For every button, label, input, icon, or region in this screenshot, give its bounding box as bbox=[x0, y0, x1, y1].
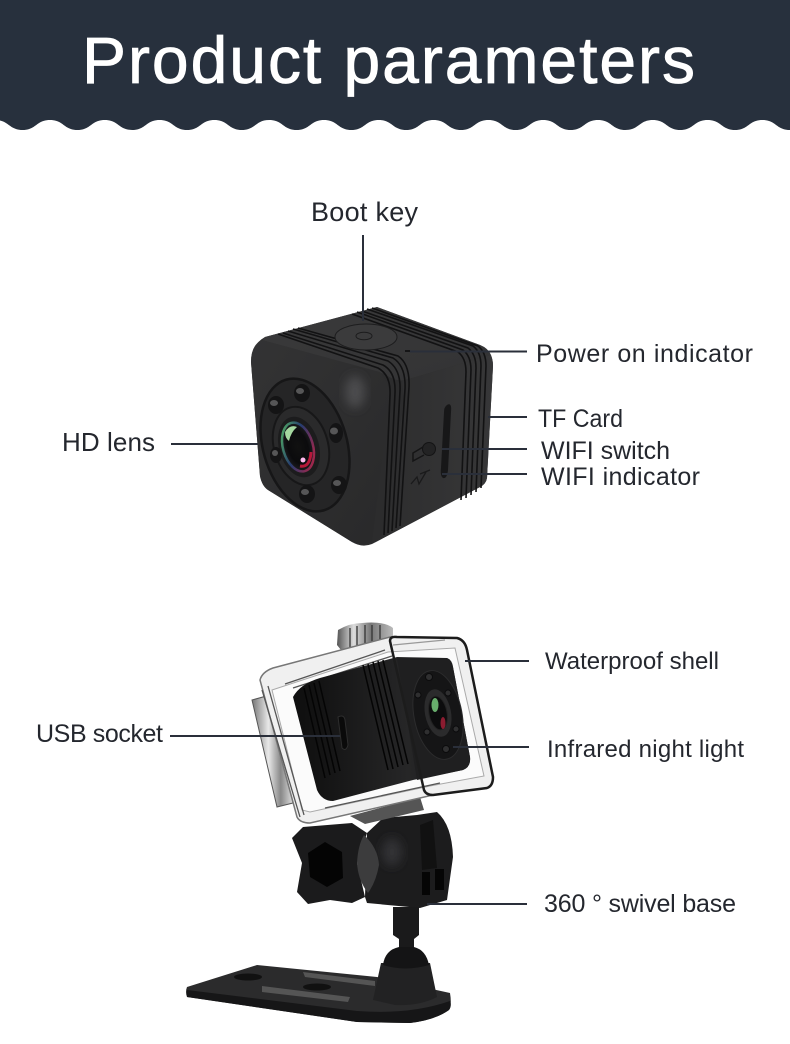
label: Power on indicator: Power on indicator bbox=[536, 340, 753, 368]
camera body silhouette bbox=[251, 307, 493, 546]
ball joint dome bbox=[383, 947, 429, 968]
hexagon socket bbox=[308, 842, 343, 887]
label: TF Card: TF Card bbox=[538, 405, 623, 433]
label: Waterproof shell: Waterproof shell bbox=[545, 648, 719, 675]
arm shading bbox=[357, 835, 379, 893]
arm cylinder highlight bbox=[382, 838, 402, 866]
top face bbox=[262, 307, 491, 380]
post bbox=[393, 907, 419, 950]
shell inner window bbox=[272, 648, 484, 812]
front LEDs bbox=[415, 674, 459, 752]
WIFI switch bbox=[413, 442, 436, 461]
black camera body bbox=[293, 657, 470, 801]
swivel knob bbox=[292, 823, 367, 904]
front lens bbox=[406, 666, 470, 764]
WIFI icon mark bbox=[411, 470, 430, 484]
corner highlight bbox=[345, 376, 365, 408]
lens glass bbox=[277, 419, 319, 475]
side hinge bbox=[252, 695, 293, 807]
product photo: camera in waterproof shell on mount bbox=[186, 623, 493, 1023]
right side face bbox=[372, 355, 493, 544]
grip ridges bbox=[278, 308, 486, 535]
shell chrome details bbox=[262, 640, 445, 817]
front frame gasket bbox=[390, 637, 493, 795]
label: 360 ° swivel base: 360 ° swivel base bbox=[544, 890, 736, 918]
front face bbox=[251, 340, 390, 544]
label: Boot key: Boot key bbox=[311, 197, 418, 227]
label: Infrared night light: Infrared night light bbox=[547, 736, 744, 763]
label: WIFI switch: WIFI switch bbox=[541, 437, 670, 465]
front camera face bbox=[397, 658, 470, 780]
LED centres bbox=[270, 388, 341, 495]
label: WIFI indicator: WIFI indicator bbox=[541, 463, 700, 491]
label: HD lens: HD lens bbox=[62, 427, 155, 457]
title: Product parameters bbox=[82, 23, 695, 97]
body ridges bbox=[304, 660, 408, 778]
product photo: camera cube bbox=[246, 307, 493, 546]
base plate bbox=[186, 965, 451, 1023]
USB slot bbox=[338, 716, 348, 749]
boot key button bbox=[335, 324, 397, 350]
mount clips bbox=[420, 820, 444, 895]
clear shell bbox=[260, 637, 493, 823]
swivel arm bbox=[365, 812, 453, 908]
ball joint base bbox=[373, 963, 437, 1005]
TF card slot bbox=[441, 404, 451, 478]
label: USB socket: USB socket bbox=[36, 720, 163, 748]
header banner with wavy bottom edge bbox=[0, 0, 790, 130]
infrared LEDs bbox=[268, 384, 347, 503]
top screw knob bbox=[337, 623, 393, 655]
lens ring bbox=[246, 368, 364, 522]
callout lines bbox=[170, 235, 529, 904]
mount lugs under shell bbox=[350, 797, 424, 824]
power indicator dot bbox=[405, 350, 410, 352]
